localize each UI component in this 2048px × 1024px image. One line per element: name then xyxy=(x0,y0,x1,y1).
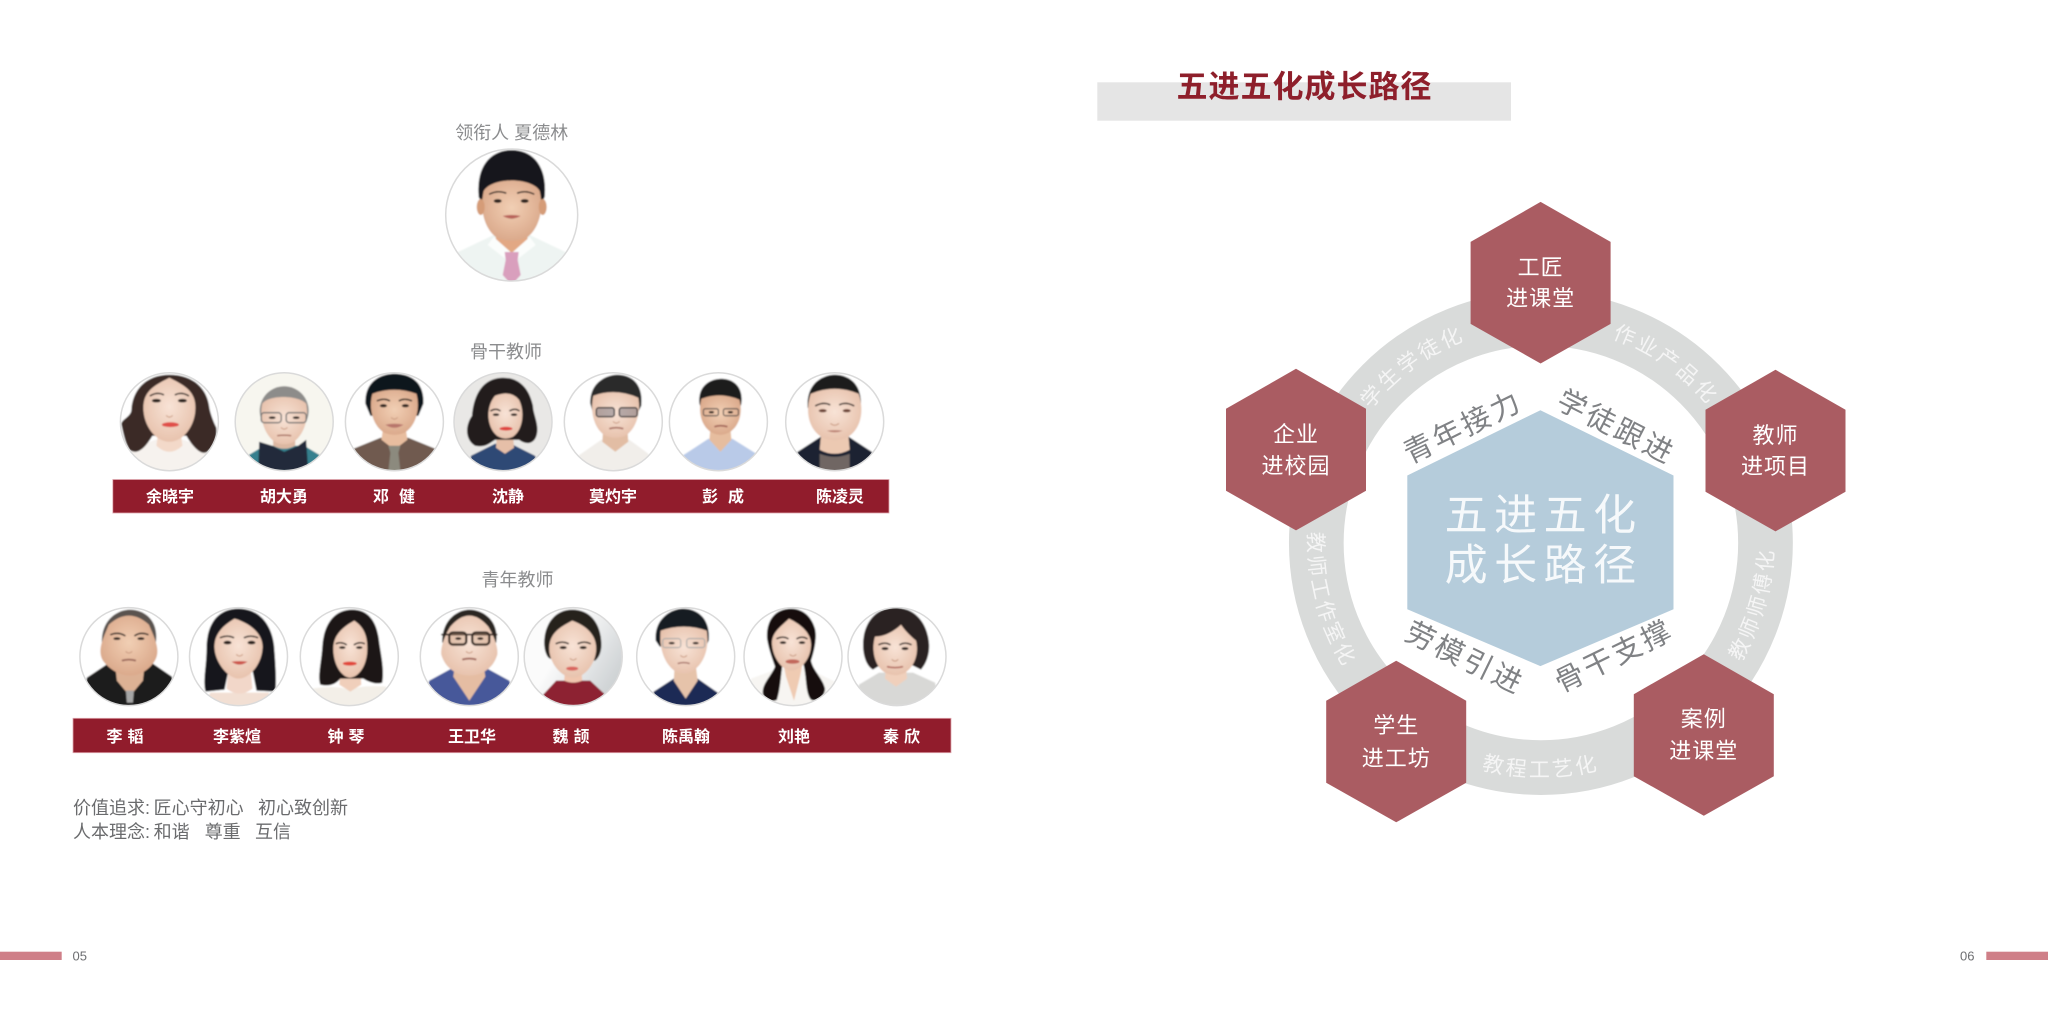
hexagon: 学生进工坊: 进工坊 xyxy=(1362,746,1431,771)
hexagon: 工匠进课堂: 工匠 xyxy=(1518,255,1564,280)
name bar: backbone teachers: 陈凌灵 xyxy=(816,487,864,506)
name bar: young teachers: 秦 欣 xyxy=(883,727,920,746)
hexagon: 企业进校园: 进校园 xyxy=(1261,454,1331,479)
hexagon: 案例进课堂: 案例 xyxy=(1681,706,1727,732)
portrait: 邓健 xyxy=(345,373,443,471)
leader label: 领衔人 夏德林 xyxy=(455,123,568,143)
ring labels: 教程工艺化 xyxy=(1483,753,1596,778)
portrait: 李韬 xyxy=(80,608,178,706)
portrait: 王卫华 xyxy=(420,608,518,706)
hexagon: 案例进课堂 xyxy=(1634,654,1774,816)
portrait: 余晓宇 xyxy=(120,373,218,471)
center hexagon: 五进五化 xyxy=(1445,492,1643,540)
title band: 五进五化成长路径 xyxy=(1176,70,1432,104)
values text block: 人本理念: xyxy=(73,822,150,842)
ring labels: 学生学徒化 xyxy=(1360,328,1462,406)
values text block: 价值追求: xyxy=(73,798,150,818)
name bar: young teachers: 李 韬 xyxy=(106,728,144,746)
center hexagon: 成长路径 xyxy=(1445,542,1643,590)
portrait: 李紫煊 xyxy=(190,608,288,706)
page number left: 05 xyxy=(72,948,87,964)
portrait: 秦欣 xyxy=(848,608,946,706)
portrait: 陈凌灵 xyxy=(786,373,884,471)
hexagon: 学生进工坊 xyxy=(1326,661,1466,822)
portrait: 魏颉 xyxy=(524,608,622,706)
name bar: young teachers: 魏 颉 xyxy=(552,728,590,746)
page number right xyxy=(1960,948,2048,964)
values text block: 尊重 xyxy=(205,822,241,842)
center hexagon xyxy=(1407,410,1674,666)
portrait: 陈禹翰 xyxy=(637,608,735,706)
name bar: young teachers xyxy=(73,718,951,753)
ring labels: 教师师傅化 xyxy=(1728,552,1774,660)
hexagon: 工匠进课堂 xyxy=(1471,202,1611,364)
values text block: 初心致创新 xyxy=(258,798,348,818)
ring labels: 教师工作室化 xyxy=(1306,532,1355,665)
portrait: 彭成 xyxy=(669,373,767,471)
title band xyxy=(1097,70,1511,121)
hexagon: 教师进项目: 教师 xyxy=(1752,423,1799,448)
inner labels: 劳模引进 xyxy=(1400,616,1530,701)
portrait: 刘艳 xyxy=(744,608,842,706)
name bar: backbone teachers: 莫灼宇 xyxy=(589,488,637,506)
page number left xyxy=(0,948,87,964)
hexagon: 学生进工坊: 学生 xyxy=(1373,713,1419,738)
diagram: five advances path xyxy=(1226,202,1846,822)
group label: young teachers: 青年教师 xyxy=(482,570,554,590)
name bar: backbone teachers: 彭 成 xyxy=(702,487,744,506)
hexagon: 企业进校园 xyxy=(1226,369,1366,530)
outer ring xyxy=(1316,318,1766,768)
name bar: young teachers: 刘艳 xyxy=(778,727,810,746)
ring labels xyxy=(1306,324,1774,778)
name bar: young teachers: 陈禹翰 xyxy=(662,727,710,746)
hexagon: 教师进项目: 进项目 xyxy=(1741,454,1810,479)
portrait: 夏德林 xyxy=(446,149,578,285)
ring labels: 作业产品化 xyxy=(1615,324,1716,403)
name bar: backbone teachers: 沈静 xyxy=(492,488,524,506)
inner labels: 学徒跟进 xyxy=(1552,384,1681,471)
inner labels: 青年接力 xyxy=(1398,385,1528,470)
hexagon: 企业进校园: 企业 xyxy=(1273,422,1319,447)
name bar: young teachers: 王卫华 xyxy=(448,727,496,746)
name bar: young teachers: 钟 琴 xyxy=(327,728,365,746)
name bar: backbone teachers: 余晓宇 xyxy=(146,487,194,506)
values text block: 互信 xyxy=(255,822,291,842)
portrait: 莫灼宇 xyxy=(564,373,662,471)
portrait: 沈静 xyxy=(454,373,552,471)
name bar: backbone teachers: 胡大勇 xyxy=(260,488,308,506)
hexagon: 教师进项目 xyxy=(1706,370,1846,531)
portrait: 钟琴 xyxy=(300,608,398,706)
inner labels xyxy=(1398,384,1681,701)
name bar: backbone teachers xyxy=(113,480,889,513)
name bar: young teachers: 李紫煊 xyxy=(213,727,261,746)
page number right: 06 xyxy=(1960,948,1974,964)
group label: backbone teachers: 骨干教师 xyxy=(470,342,542,362)
inner labels: 骨干支撑 xyxy=(1549,614,1679,699)
hexagon: 案例进课堂: 进课堂 xyxy=(1669,738,1738,764)
values text block: 匠心守初心 xyxy=(154,798,244,818)
name bar: backbone teachers: 邓 健 xyxy=(373,487,415,506)
portrait: 胡大勇 xyxy=(235,373,333,471)
values text block xyxy=(73,798,348,842)
hexagon: 工匠进课堂: 进课堂 xyxy=(1506,286,1575,311)
values text block: 和谐 xyxy=(154,822,190,842)
